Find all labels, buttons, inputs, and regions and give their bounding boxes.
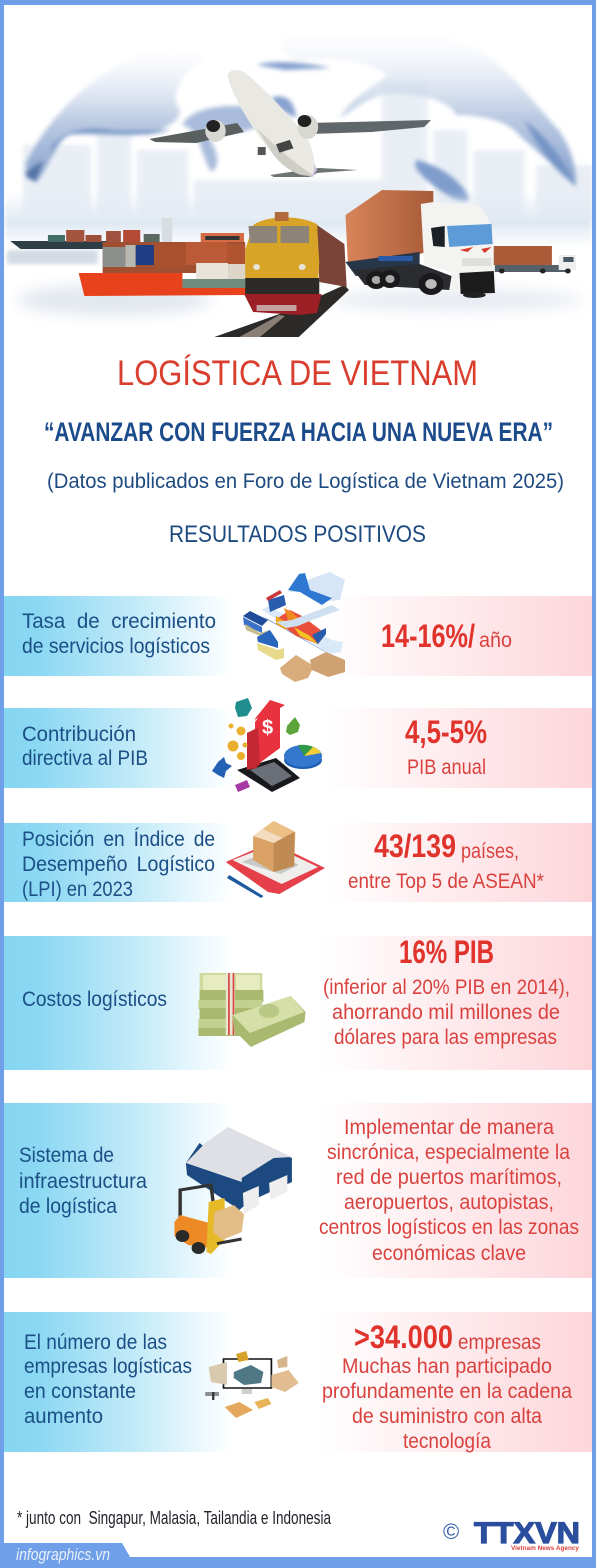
section heading: RESULTADOS POSITIVOS [169,521,426,548]
value: logistics companies [322,1319,572,1453]
value: logistics costs: 16% PIB [399,934,494,970]
label: growth rate: Tasa de crecimiento [22,610,216,633]
source note: (Datos publicados en Foro de Logística de Vietnam 2025) [47,470,564,493]
world map globe backdrop [25,30,576,201]
label: logistics companies: aumento [24,1405,103,1428]
icon: far truck [494,246,576,274]
value: infrastructure: Implementar de manera [344,1116,554,1139]
icon: train on track [214,212,349,337]
city skyline haze [23,80,593,220]
panel: logistics companies [4,1312,592,1453]
value: GDP contribution [405,714,487,779]
label: logistics companies: El número de las [24,1331,167,1354]
icon: red container ship [79,233,249,296]
label: infrastructure: infraestructura [19,1170,147,1193]
icon: warehouse and forklift [174,1127,292,1254]
icon: computer and warehouse network [205,1351,299,1418]
icon: cash stacks [198,973,306,1047]
icon: calculator, arrow, coins and pie: $ [262,717,273,739]
value: infrastructure: red de puertos marítimos, [336,1166,562,1189]
label: LPI position: (LPI) en 2023 [22,878,133,901]
label: logistics costs: Costos logísticos [22,988,167,1011]
label: infrastructure: Sistema de [19,1144,114,1167]
value: infrastructure: aeropuertos, autopistas, [344,1191,554,1214]
label: infrastructure [19,1144,147,1218]
label: growth rate [22,610,216,658]
value: infrastructure: sincrónica, especialmente la [327,1141,570,1164]
label: GDP contribution: Contribución [22,723,136,746]
icon: calculator, arrow, coins and pie [212,698,322,792]
panel: logistics costs [4,934,592,1070]
value: logistics companies: >34.000 [354,1319,453,1355]
title: LOGÍSTICA DE VIETNAM [117,354,478,393]
value: logistics companies: tecnología [403,1430,491,1453]
value: LPI position: países, [461,840,519,863]
value: logistics costs: ahorrando mil millones de [332,1001,560,1024]
water haze band [5,190,592,245]
label: LPI position: Desempeño Logístico [22,853,215,876]
logo: TTXVN with copyright: © [443,1519,459,1544]
logo: TTXVN with copyright: Vietnam News Agency [511,1546,580,1552]
label: logistics companies: empresas logísticas [24,1355,192,1378]
footnote: * junto con Singapur, Malasia, Tailandia e Indonesia [17,1508,332,1528]
logo: TTXVN with copyright [443,1517,580,1552]
value: logistics companies: Muchas han participado [342,1355,552,1378]
value: growth rate: 14-16%/ [381,618,475,654]
value: logistics companies: empresas [458,1331,541,1354]
label: logistics companies: en constante [24,1380,136,1403]
logo: TTXVN with copyright: TTXVN [474,1517,580,1550]
icon: container truck [346,190,496,298]
panel: GDP contribution [4,698,592,792]
value: infrastructure: económicas clave [372,1242,526,1265]
label: logistics companies [24,1331,192,1428]
footer tab: site name [0,1543,596,1568]
value: LPI position: 43/139 [374,828,456,864]
panel: LPI position [4,821,592,902]
value: logistics costs [323,934,570,1049]
label: infrastructure: de logística [19,1195,117,1218]
icon: ship, plane, trucks and pallets [243,572,345,682]
value: logistics companies: de suministro con alta [352,1405,542,1428]
value: LPI position [348,828,544,893]
footer tab: site name: infographics.vn [16,1545,110,1564]
value: GDP contribution: PIB anual [407,756,486,779]
panel: growth rate [4,572,592,682]
icon: distant container ship [10,218,172,249]
label: GDP contribution: directiva al PIB [22,747,148,770]
value: logistics costs: (inferior al 20% PIB en 2014), [323,976,570,999]
value: infrastructure [319,1116,579,1265]
panel: infrastructure [4,1103,592,1278]
value: LPI position: entre Top 5 de ASEAN* [348,870,544,893]
hero illustration: transport over globe [5,30,593,337]
value: logistics companies: profundamente en la cadena [322,1380,572,1403]
label: LPI position [22,828,215,901]
value: logistics costs: dólares para las empresas [334,1026,557,1049]
icon: parcel on clipboard with pen [226,821,325,898]
value: GDP contribution: 4,5-5% [405,714,487,750]
label: LPI position: Posición en Índice de [22,828,215,851]
label: growth rate: de servicios logísticos [22,635,210,658]
label: GDP contribution [22,723,148,770]
icon: airplane [149,70,431,177]
value: growth rate: año [479,629,512,652]
